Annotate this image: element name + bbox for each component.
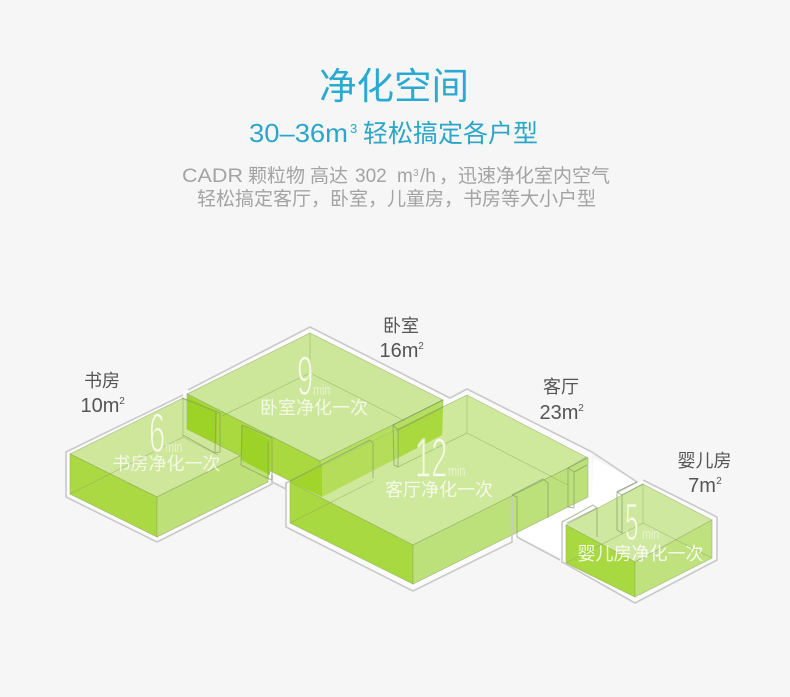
subtitle: 30–36m bbox=[249, 118, 348, 148]
bedroom overlap: front part bbox=[322, 407, 443, 497]
label: living room: 23m bbox=[540, 402, 578, 424]
description bbox=[182, 165, 610, 210]
study time: 6 bbox=[149, 403, 165, 465]
label: study: 书房 bbox=[84, 371, 120, 391]
room: study volume bbox=[70, 398, 270, 537]
label: baby room: 婴儿房 bbox=[678, 451, 732, 471]
label: bedroom: 卧室 bbox=[383, 316, 419, 336]
description: CADR bbox=[182, 166, 243, 187]
label: bedroom bbox=[380, 316, 424, 362]
description: m bbox=[397, 166, 413, 187]
label: baby room bbox=[678, 451, 732, 497]
baby room time: 婴儿房净化一次 bbox=[578, 544, 704, 564]
subtitle bbox=[249, 118, 538, 148]
baby room time: min bbox=[642, 525, 659, 542]
white floor: baby room bbox=[562, 480, 717, 603]
baby room time: 5 bbox=[625, 492, 639, 552]
label: study: 10m bbox=[81, 395, 119, 417]
description: 3 bbox=[413, 168, 419, 179]
title: 净化空间 bbox=[319, 66, 469, 107]
label: bedroom: 2 bbox=[418, 341, 424, 352]
living time: 12 bbox=[415, 428, 447, 490]
description: 轻松搞定客厅，卧室，儿童房，书房等大小户型 bbox=[197, 188, 596, 210]
room: baby room volume bbox=[566, 484, 712, 597]
partitions bbox=[182, 398, 643, 537]
label: living room: 2 bbox=[578, 403, 584, 414]
living time: min bbox=[448, 462, 465, 479]
bedroom overlap: dark corner bbox=[290, 466, 322, 497]
bedroom overlap: strong band bbox=[398, 407, 443, 458]
label: baby room: 7m bbox=[688, 475, 716, 497]
white floor: study and bedroom bbox=[66, 327, 450, 542]
bedroom time: 卧室净化一次 bbox=[260, 398, 368, 418]
outer walls bbox=[66, 327, 717, 603]
bedroom time bbox=[260, 346, 368, 418]
subtitle: 3 bbox=[350, 121, 357, 136]
living time bbox=[385, 428, 493, 500]
label: living room bbox=[540, 377, 584, 424]
label: living room: 客厅 bbox=[543, 377, 579, 397]
description: 302 bbox=[355, 166, 387, 187]
bedroom time: 9 bbox=[297, 346, 313, 408]
label: bedroom: 16m bbox=[380, 340, 418, 362]
white floor between living and baby room bbox=[517, 458, 637, 558]
description: 高达 bbox=[310, 165, 348, 187]
room: living volume bbox=[290, 395, 588, 584]
room: bedroom volume bbox=[187, 333, 443, 497]
study time: min bbox=[165, 438, 182, 455]
study time: 书房净化一次 bbox=[112, 454, 220, 474]
label: study bbox=[81, 371, 125, 417]
description: ，迅速净化室内空气 bbox=[439, 165, 610, 187]
floor plan bbox=[66, 327, 717, 603]
label: baby room: 2 bbox=[716, 476, 722, 487]
description: /h bbox=[420, 166, 436, 187]
bedroom time: min bbox=[313, 381, 330, 398]
study time bbox=[112, 403, 220, 474]
description: 颗粒物 bbox=[248, 165, 305, 187]
subtitle: 轻松搞定各户型 bbox=[363, 120, 538, 148]
label: study: 2 bbox=[119, 396, 125, 407]
baby room time bbox=[578, 492, 704, 564]
living time: 客厅净化一次 bbox=[385, 480, 493, 500]
white floor: living bbox=[286, 389, 592, 591]
bedroom dark band 2 bbox=[241, 425, 270, 475]
bedroom dark band 1 bbox=[187, 396, 217, 444]
